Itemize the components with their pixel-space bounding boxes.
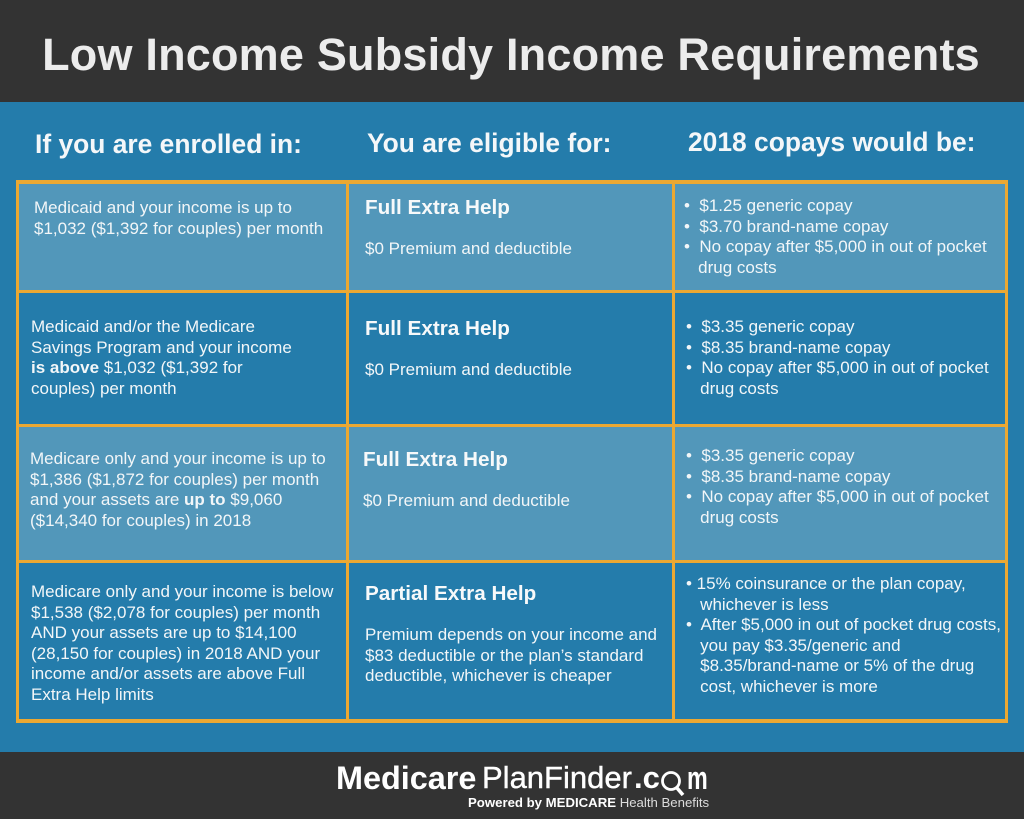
logo: MedicarePlanFinder.com: Medicare: [336, 760, 476, 796]
row 1 eligibility: [365, 196, 572, 258]
row 4 copays: • 15% coinsurance or the plan copay,: [686, 574, 966, 593]
column heading: eligible: You are eligible for:: [367, 128, 611, 158]
row 2 copays: • No copay after $5,000 in out of pocket: [686, 358, 989, 377]
column heading: enrolled: If you are enrolled in:: [35, 129, 302, 159]
row 2 enrollment text: Savings Program and your income: [31, 338, 292, 356]
row 1 copays: [684, 196, 987, 276]
icon: magnifying glass: [661, 771, 684, 796]
row 2 copays: • $3.35 generic copay: [686, 317, 855, 336]
row 2 copays: drug costs: [700, 378, 779, 398]
row 2 enrollment text: Medicaid and/or the Medicare: [31, 317, 255, 336]
row 4 enrollment text: AND your assets are up to $14,100: [31, 623, 297, 642]
row 4 enrollment text: Extra Help limits: [31, 684, 154, 704]
row 4 copays: you pay $3.35/generic and: [700, 636, 901, 654]
row 3 eligibility: $0 Premium and deductible: [363, 491, 570, 510]
row 3 copays: drug costs: [700, 508, 779, 526]
logo: MedicarePlanFinder.com: [336, 760, 708, 796]
row 1 copays: • $1.25 generic copay: [684, 196, 853, 215]
row 2 enrollment text: [31, 317, 292, 398]
logo: MedicarePlanFinder.com: m: [687, 760, 708, 796]
row 3 enrollment text: Medicare only and your income is up to: [30, 449, 326, 468]
row 3 enrollment text: [30, 449, 326, 530]
column heading: copays: 2018 copays would be:: [688, 127, 975, 157]
row 3 eligibility: [363, 448, 570, 510]
row 4 eligibility: Premium depends on your income and: [365, 625, 657, 644]
title banner: [0, 0, 1024, 102]
row 2 eligibility: $0 Premium and deductible: [365, 360, 572, 379]
row 2 enrollment text: is above $1,032 ($1,392 for: [31, 358, 243, 377]
row 3 copays: • $8.35 brand-name copay: [686, 466, 890, 486]
row 1 enrollment text: Medicaid and your income is up to: [34, 198, 292, 217]
row 4 copays: [686, 574, 1001, 696]
title: Low Income Subsidy Income Requirements: [42, 29, 980, 80]
row 3 enrollment text: and your assets are up to $9,060: [30, 490, 282, 509]
row 1 copays: • No copay after $5,000 in out of pocket: [684, 237, 987, 256]
row 1 eligibility: Full Extra Help: [365, 196, 510, 219]
row 1 enrollment text: [34, 198, 323, 238]
row 1 enrollment text: $1,032 ($1,392 for couples) per month: [34, 218, 323, 238]
row 4 copays: cost, whichever is more: [700, 676, 878, 696]
row 4 enrollment text: income and/or assets are above Full: [31, 664, 305, 683]
row 3 copays: • $3.35 generic copay: [686, 446, 855, 465]
row 4 copays: • After $5,000 in out of pocket drug costs,: [686, 615, 1001, 634]
row 2 enrollment text: couples) per month: [31, 378, 177, 398]
row 2 eligibility: Full Extra Help: [365, 317, 510, 340]
row 4 enrollment text: (28,150 for couples) in 2018 AND your: [31, 644, 320, 662]
row 4 eligibility: deductible, whichever is cheaper: [365, 666, 612, 685]
row 4 enrollment text: $1,538 ($2,078 for couples) per month: [31, 602, 320, 622]
row 4 copays: $8.35/brand-name or 5% of the drug: [700, 656, 974, 675]
logo: MedicarePlanFinder.com: PlanFinder: [482, 760, 632, 795]
row 3 enrollment text: $1,386 ($1,872 for couples) per month: [30, 470, 319, 488]
row 3 enrollment text: ($14,340 for couples) in 2018: [30, 510, 251, 530]
row 2 copays: [686, 317, 989, 398]
row 1 shading: [16, 181, 1007, 292]
row 4 enrollment text: Medicare only and your income is below: [31, 582, 333, 601]
row 4 eligibility: [365, 582, 657, 685]
row 3 copays: • No copay after $5,000 in out of pocket: [686, 487, 989, 506]
footer banner: [0, 752, 1024, 819]
row 1 copays: drug costs: [698, 258, 777, 276]
row 3 copays: [686, 446, 989, 526]
row 2 copays: • $8.35 brand-name copay: [686, 338, 890, 356]
row 4 eligibility: Partial Extra Help: [365, 582, 536, 605]
row 1 eligibility: $0 Premium and deductible: [365, 239, 572, 258]
row 1 copays: • $3.70 brand-name copay: [684, 216, 888, 236]
row 3 eligibility: Full Extra Help: [363, 448, 508, 471]
row 3 shading: [16, 426, 1007, 561]
row 4 copays: whichever is less: [700, 594, 829, 614]
row 4 eligibility: $83 deductible or the plan’s standard: [365, 646, 644, 664]
tagline: Powered by MEDICARE Health Benefits: [468, 795, 709, 810]
logo: MedicarePlanFinder.com: .c: [634, 760, 660, 795]
row 4 enrollment text: [31, 582, 334, 704]
row 2 eligibility: [365, 317, 572, 379]
